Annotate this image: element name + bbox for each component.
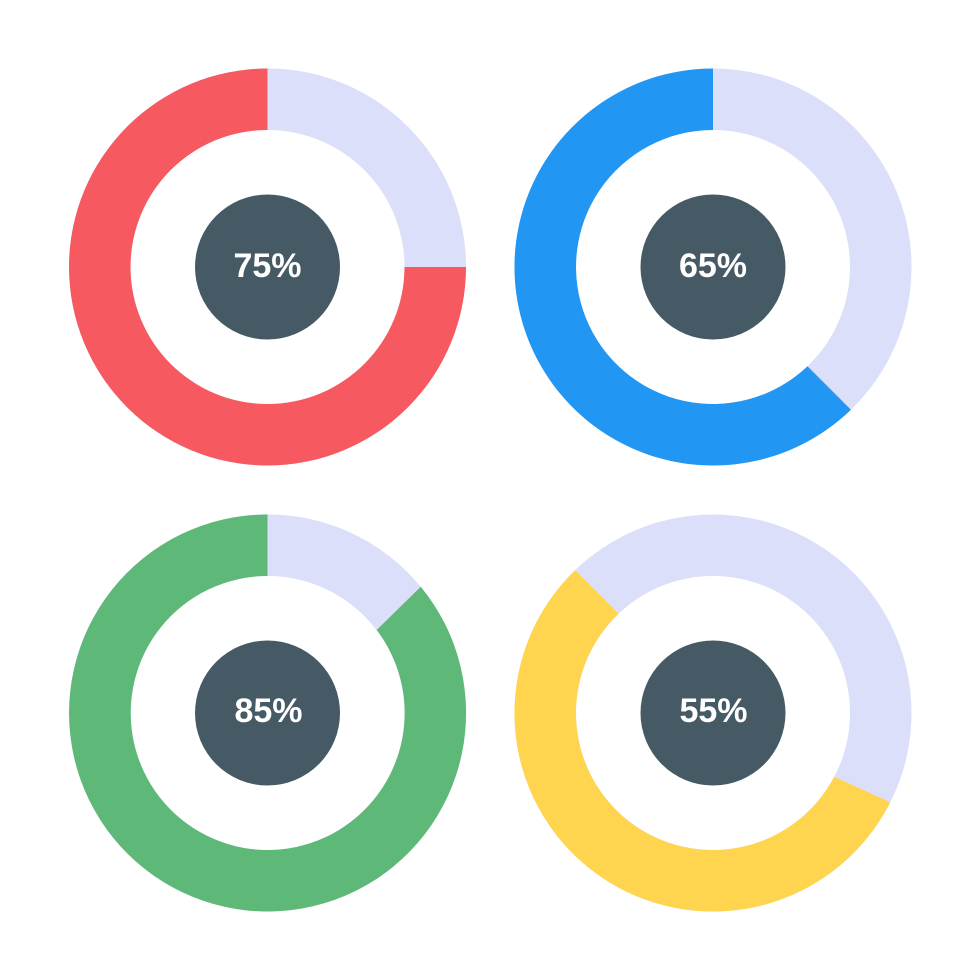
donut chart: 65% blue (514, 68, 912, 466)
label: 55%: 55% (679, 692, 748, 730)
ring: remaining track (69, 68, 466, 466)
donut chart: 85% green (69, 514, 466, 912)
center badge (640, 640, 786, 786)
center badge (195, 194, 340, 340)
ring: yellow progress segment (514, 570, 890, 912)
label: 75%: 75% (233, 247, 302, 285)
ring: remaining track (69, 514, 466, 912)
ring: red progress segment (69, 68, 466, 465)
label: 65%: 65% (679, 247, 747, 285)
label: 85%: 85% (234, 692, 303, 730)
ring: remaining track (514, 514, 912, 912)
donut chart: 55% yellow (514, 514, 912, 912)
donut chart: 75% red (69, 68, 466, 466)
center badge (640, 194, 786, 340)
ring: remaining track (514, 68, 912, 465)
ring: green progress segment (69, 514, 466, 912)
ring: blue progress segment (514, 68, 851, 466)
center badge (195, 640, 340, 786)
